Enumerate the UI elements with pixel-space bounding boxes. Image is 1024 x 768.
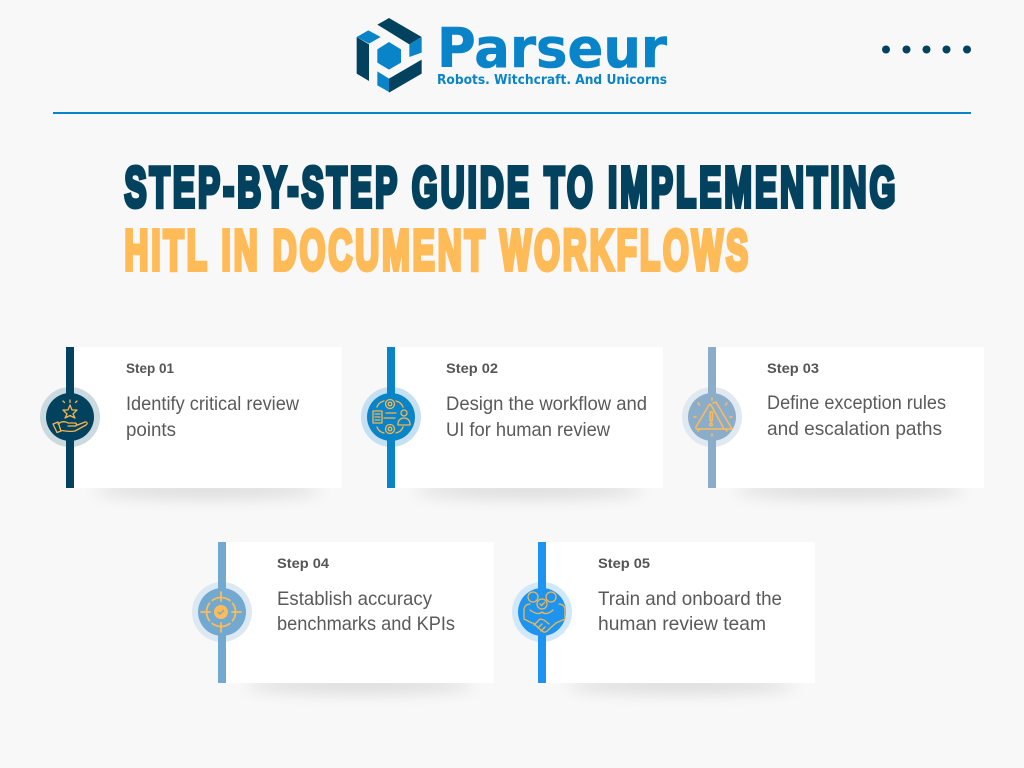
step text: Establish accuracy [277, 588, 432, 610]
step text: Train and onboard the [598, 588, 782, 610]
step label: Step 02 [446, 360, 498, 376]
step label: Step 05 [598, 555, 650, 571]
step text: Define exception rules [767, 392, 946, 414]
panel: step 01 [40, 347, 342, 498]
step text: benchmarks and KPIs [277, 613, 455, 635]
title line 2: HITL IN DOCUMENT WORKFLOWS [124, 218, 748, 282]
step text [446, 393, 647, 441]
step text: human review team [598, 613, 766, 635]
logo: Parseur [357, 17, 667, 93]
icon: warning triangle [694, 398, 732, 436]
step text: Identify critical review [126, 393, 300, 415]
step text [126, 393, 300, 441]
title [124, 155, 895, 282]
step text: UI for human review [446, 419, 611, 441]
step text: Design the workflow and [446, 393, 647, 415]
icon: team handshake [524, 592, 565, 632]
step text [767, 392, 946, 440]
step label: Step 03 [767, 360, 819, 376]
panel: step 04 [192, 542, 494, 693]
icon: target with check [201, 592, 241, 632]
step label: Step 04 [277, 555, 329, 571]
icon: hand holding star [53, 400, 87, 432]
step label: Step 01 [126, 360, 174, 376]
panel: step 02 [361, 347, 663, 498]
panel: step 05 [512, 542, 815, 693]
title line 1: STEP-BY-STEP GUIDE TO IMPLEMENTING [124, 155, 895, 219]
logo wordmark: Parseur [437, 17, 667, 80]
step text: and escalation paths [767, 418, 942, 440]
icon: workflow gears [373, 400, 410, 434]
step text [277, 588, 455, 635]
step text [598, 588, 782, 635]
logo mark [357, 18, 422, 93]
decorative dots [882, 46, 971, 54]
panel: step 03 [682, 347, 984, 498]
step text: points [126, 419, 176, 441]
logo tagline: Robots. Witchcraft. And Unicorns [437, 73, 667, 88]
